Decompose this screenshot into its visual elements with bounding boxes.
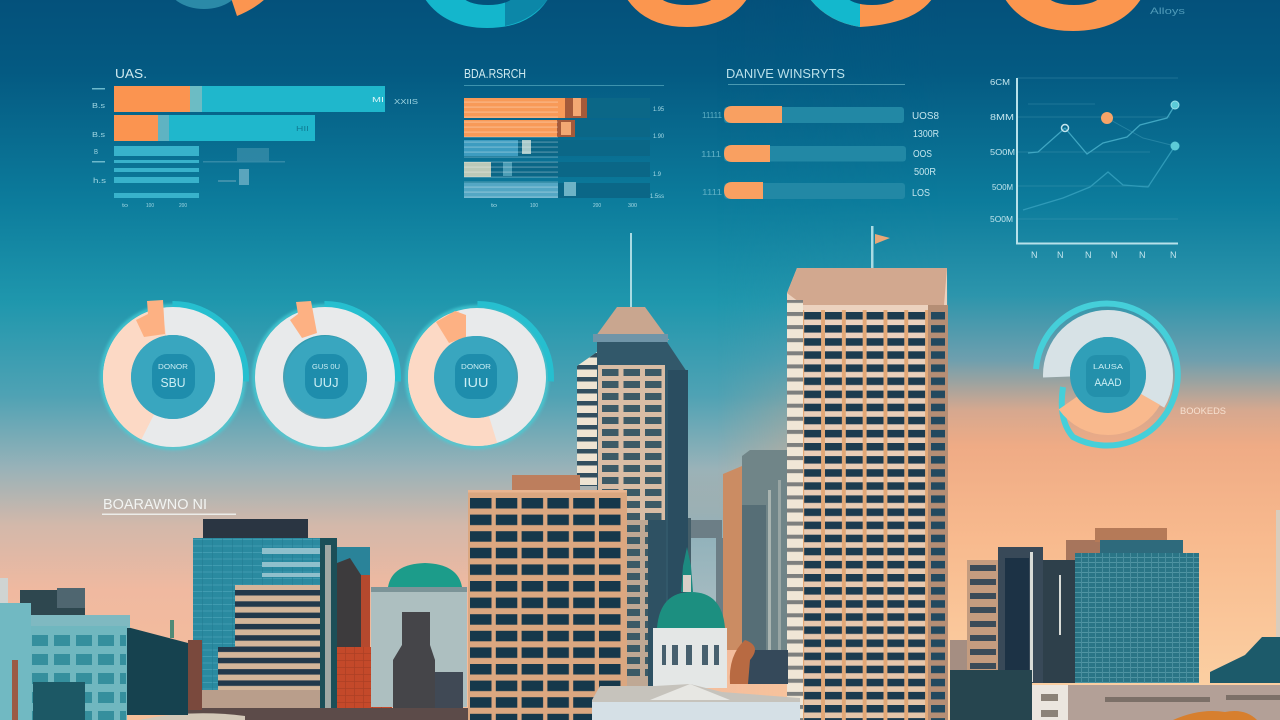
x-axis labels — [1031, 250, 1176, 260]
grey ring — [422, 322, 532, 432]
building: right low structures — [950, 510, 1280, 720]
x-axis labels: N — [1139, 250, 1146, 260]
progress bar 3 — [724, 182, 905, 199]
data line 1 — [1028, 105, 1175, 154]
value labels — [491, 107, 665, 209]
bar value labels: HII — [296, 126, 309, 133]
heading: BDA.RSRCH — [464, 66, 526, 81]
teal outer arc — [100, 304, 246, 450]
donut chart C — [405, 304, 551, 450]
value labels: 1.90 — [653, 134, 665, 140]
heading: lower left with underline: BOARAWNO NI — [103, 496, 207, 513]
bar value labels: B.s — [92, 103, 106, 110]
building: capitol dome — [592, 547, 800, 720]
center value — [1086, 355, 1130, 397]
progress bar 2 — [724, 145, 906, 162]
building: foreground rooftops left — [139, 708, 468, 720]
bar value labels: 200 — [179, 203, 187, 209]
building: background tower with frame — [688, 518, 723, 668]
inner circle — [434, 336, 516, 418]
row 5 bar — [464, 182, 576, 198]
x-axis labels: N — [1111, 250, 1118, 260]
grey ring — [269, 321, 381, 433]
peach arc — [1059, 326, 1157, 424]
marker: ring on line 1 — [1062, 124, 1068, 132]
bar value labels: XXIIS — [394, 99, 418, 106]
y-axis labels: 5O0M — [992, 182, 1013, 192]
donut 3 — [627, 0, 747, 27]
top right faint label: Alloys — [1150, 6, 1186, 16]
heading: UAS. — [115, 66, 147, 81]
center value — [152, 354, 195, 399]
center value: UUJ — [314, 375, 338, 390]
value labels: 1.95 — [653, 107, 665, 113]
value labels: to — [491, 203, 497, 209]
bar value labels: MI — [372, 97, 384, 104]
panel: middle bar chart — [464, 66, 665, 209]
orange tab — [136, 300, 165, 337]
bar value labels — [92, 97, 418, 209]
row 4 bar — [464, 162, 512, 177]
x-axis labels: N — [1170, 250, 1176, 260]
row 3 bar — [464, 140, 531, 156]
data line 2 — [1023, 146, 1175, 210]
bar value labels: 100 — [146, 203, 154, 209]
value labels — [701, 111, 939, 199]
donut 1 — [166, 0, 266, 16]
value labels: UOS8 — [912, 111, 939, 122]
teal spiral ring — [1036, 304, 1178, 446]
large bar 2 — [114, 115, 315, 141]
value labels: OOS — [913, 149, 932, 160]
building: middle tower with spire — [577, 233, 688, 690]
panel: line chart — [990, 77, 1180, 260]
building: left teal block — [0, 578, 202, 720]
teal outer arc — [252, 304, 398, 450]
small striped bars — [114, 146, 199, 198]
building: dark and red tower — [337, 547, 392, 710]
data line 3 — [1107, 118, 1175, 146]
gridlines — [1017, 78, 1178, 219]
progress bar 1 — [724, 106, 904, 123]
x-axis labels: N — [1031, 250, 1038, 260]
marker: orange dot — [1101, 112, 1113, 124]
donut 2 — [425, 0, 548, 28]
y-axis labels: 5O0M — [990, 147, 1015, 157]
building: right glass tower — [967, 528, 1199, 683]
panel: rounded progress bars — [701, 66, 939, 199]
bar tracks — [464, 98, 650, 198]
large bar 1 — [114, 86, 385, 112]
small data marks — [203, 148, 285, 185]
value labels: 1111 — [702, 188, 723, 197]
grey ring — [117, 321, 229, 433]
value labels: LOS — [912, 188, 930, 199]
bar value labels: h.s — [93, 178, 107, 185]
value labels: 1300R — [913, 129, 939, 140]
row 2 bar — [464, 120, 575, 137]
center value — [455, 354, 497, 399]
orange tab — [436, 311, 466, 343]
bar value labels: to — [122, 203, 128, 209]
building: big front tower with flag — [787, 226, 948, 720]
y-axis labels: 6CM — [990, 77, 1010, 87]
inner circle — [285, 336, 367, 418]
center value: LAUSA — [1093, 364, 1123, 371]
x-axis labels: N — [1057, 250, 1064, 260]
inner circle — [1070, 337, 1146, 413]
heading: DANIVE WINSRYTS — [726, 66, 845, 81]
building: small dark annex with tree — [730, 640, 788, 684]
bar value labels: B.s — [92, 132, 106, 139]
teal outer arc — [405, 304, 551, 450]
y-axis labels: 5O0M — [990, 214, 1013, 224]
y-axis labels: 8MM — [990, 112, 1014, 122]
value labels: 1.9 — [653, 172, 662, 178]
center value: DONOR — [158, 364, 188, 371]
donut 4 — [810, 0, 932, 27]
row 1 bar — [464, 98, 587, 118]
center value — [305, 354, 348, 399]
inner circle — [131, 335, 215, 419]
donut chart D — [1036, 304, 1178, 446]
panel: left bar chart — [92, 66, 418, 209]
value labels: 200 — [593, 203, 601, 209]
peach segment — [117, 321, 229, 433]
orange tab — [290, 301, 317, 338]
bar value labels: B — [94, 149, 98, 156]
building: blue glass office — [193, 519, 337, 710]
marker: end of line 2 — [1170, 142, 1180, 150]
value labels: 100 — [530, 203, 538, 209]
top row of cropped donut charts — [166, 0, 1186, 31]
label: right donut callout: BOOKEDS — [1180, 406, 1226, 416]
donut 5 — [1005, 0, 1141, 31]
center value: AAAD — [1094, 377, 1122, 389]
center value: GUS 0U — [312, 364, 340, 371]
x-axis labels: N — [1085, 250, 1092, 260]
center value: IUU — [464, 375, 488, 390]
marker: end of line 1 — [1171, 101, 1179, 109]
center value: DONOR — [461, 364, 491, 371]
city skyline — [0, 226, 1280, 720]
building: domed hall — [371, 563, 467, 710]
value labels: 300 — [628, 203, 637, 209]
donut chart A — [100, 300, 246, 450]
building: brick tower in front — [468, 475, 627, 720]
value labels: 1111 — [701, 150, 722, 159]
value labels: 1.5ss — [650, 194, 664, 200]
donut chart B — [252, 301, 398, 450]
axes — [1017, 78, 1178, 244]
peach segment — [422, 322, 532, 432]
value labels: 500R — [914, 167, 936, 178]
y-axis labels — [990, 77, 1015, 224]
value labels: 11111 — [702, 111, 723, 120]
grey arc — [1056, 324, 1160, 426]
center value: SBU — [160, 375, 186, 390]
building: third tower — [723, 450, 787, 650]
